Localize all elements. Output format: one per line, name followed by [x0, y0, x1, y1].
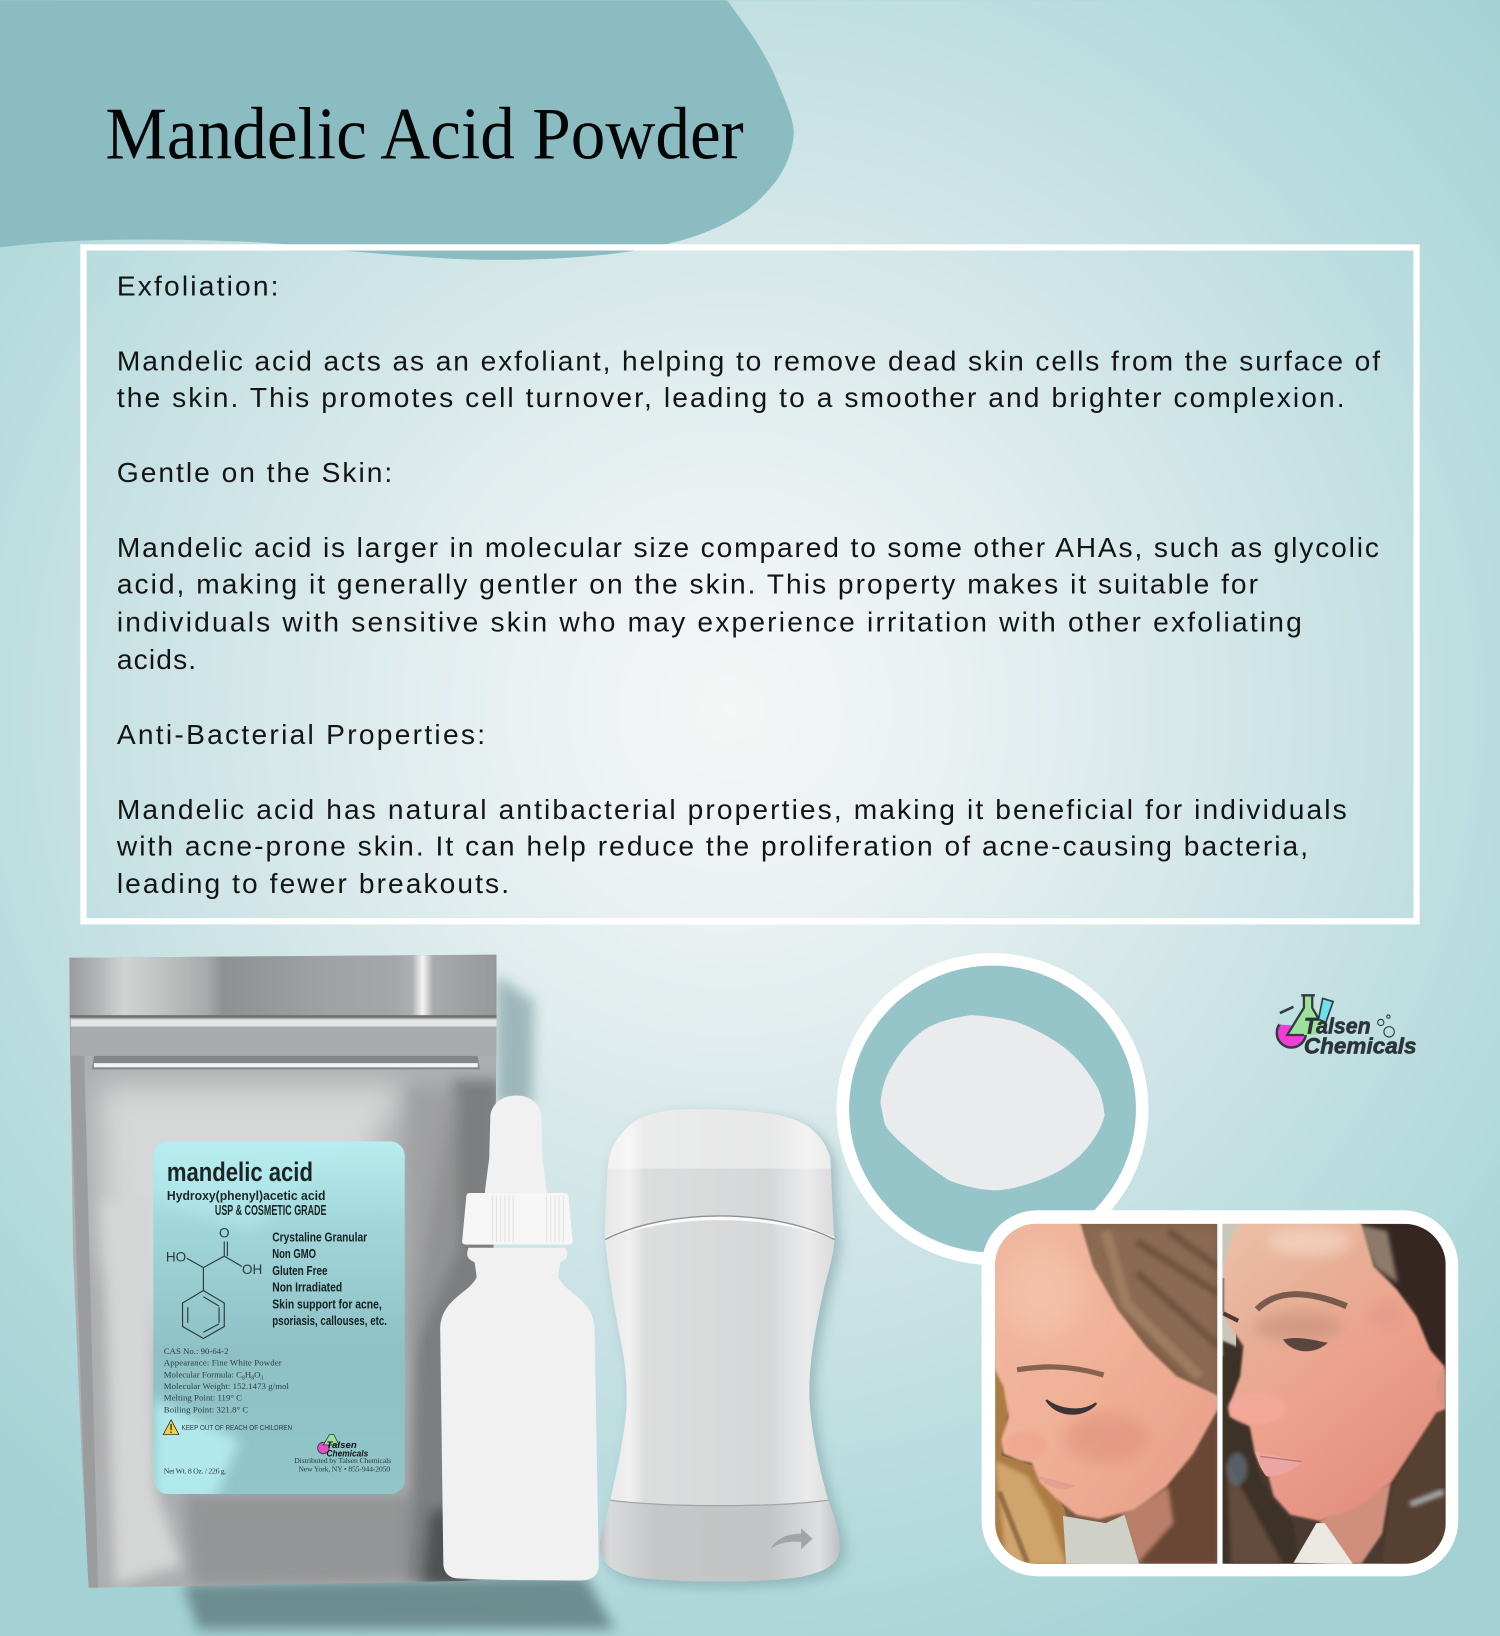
label distributor: Distributed by Talsen Chemicals: [294, 1456, 391, 1465]
freckled cheek: [1064, 1413, 1147, 1463]
panel: benefits text frame: [83, 247, 1417, 921]
product label: [153, 1141, 405, 1502]
icon: warning triangle: [163, 1420, 179, 1434]
eye: [1283, 1338, 1328, 1351]
title: Mandelic Acid Powder: [105, 94, 744, 176]
heading: anti-bacterial properties: Anti-Bacterial Properties:: [117, 719, 485, 750]
label chemical data: H: [245, 1370, 252, 1380]
label chemical data: 8: [251, 1376, 254, 1382]
foil reflections: [69, 1028, 501, 1588]
logo wordmark: Talsen: [1304, 1013, 1371, 1038]
stick container: [595, 1104, 845, 1591]
label chemical data: [164, 1346, 290, 1415]
text block: gentle on the skin: acid, making it generally gentler on the skin. This property makes it suitable for: [117, 569, 1258, 600]
text block: gentle on the skin: Mandelic acid is larger in molecular size compared to some other AHAs, such as glycolic: [117, 532, 1379, 563]
label sheen: [154, 1204, 264, 1494]
label chemical data: Molecular Weight: 152.1473 g/mol: [164, 1381, 290, 1391]
photo: before: [991, 1221, 1218, 1565]
powder pile: [880, 1015, 1105, 1190]
small logo: [318, 1434, 368, 1458]
label chemical data: 8: [242, 1376, 245, 1382]
forehead highlight: [1267, 1227, 1351, 1256]
text block: anti-bacterial properties: with acne-prone skin. It can help reduce the proliferation of acne-causing bacteria,: [116, 831, 1308, 862]
pouch zip line: [92, 1056, 480, 1069]
label features list: Gluten Free: [272, 1263, 328, 1278]
label net weight: Net Wt. 8 Oz. / 226 g.: [164, 1467, 226, 1476]
brand logo: [1277, 995, 1417, 1059]
text block: exfoliation: [117, 346, 1380, 413]
label chemical data: O: [254, 1370, 260, 1380]
bottle cap: [462, 1193, 573, 1245]
molecule diagram: OH: [242, 1262, 262, 1277]
label chemical data: Melting Point: 119° C: [164, 1393, 242, 1403]
molecule diagram: HO: [166, 1249, 186, 1264]
header blob: [0, 0, 794, 260]
hair: [995, 1224, 1218, 1565]
brand logo: Chemicals: [1304, 1034, 1417, 1059]
powder circle: [837, 953, 1148, 1265]
label subheading: Hydroxy(phenyl)acetic acid: [167, 1188, 325, 1203]
label features list: [272, 1230, 387, 1328]
stick lower seam: [610, 1500, 828, 1506]
text block: gentle on the skin: [117, 532, 1379, 675]
icon: flasks: [1277, 995, 1333, 1047]
heading: exfoliation: Exfoliation:: [117, 270, 279, 301]
robe: [1063, 1515, 1139, 1564]
neck: [1121, 1487, 1174, 1564]
blue flask: [1318, 998, 1333, 1022]
label chemical data: Molecular Formula: C: [164, 1370, 242, 1380]
text block: exfoliation: Mandelic acid acts as an exfoliant, helping to remove dead skin cells from the surface of: [117, 346, 1380, 377]
face skin: [991, 1221, 1218, 1519]
label features list: psoriasis, callouses, etc.: [272, 1313, 387, 1328]
text block: anti-bacterial properties: Mandelic acid has natural antibacterial properties, making it beneficial for individuals: [117, 794, 1347, 825]
label distributor: [294, 1456, 391, 1474]
nose tip: [1008, 1433, 1044, 1456]
label warning: KEEP OUT OF REACH OF CHILDREN: [182, 1423, 292, 1432]
icon: arrow: [770, 1528, 813, 1549]
icon: bubbles: [1378, 1015, 1394, 1037]
label features list: Crystaline Granular: [272, 1230, 367, 1245]
label features list: Non Irradiated: [272, 1280, 342, 1295]
label distributor: New York, NY • 855-944-2050: [298, 1465, 390, 1474]
label chemical data: 3: [260, 1376, 263, 1382]
lips: [1038, 1476, 1076, 1489]
text block: anti-bacterial properties: [116, 794, 1347, 899]
molecule diagram: [166, 1225, 262, 1339]
photo: after: [1223, 1221, 1446, 1564]
stick cap highlight: [608, 1109, 831, 1168]
label chemical data: CAS No.: 90-64-2: [164, 1346, 228, 1356]
neck: [1320, 1484, 1390, 1564]
small logo: Chemicals: [326, 1448, 368, 1458]
hair: [1223, 1224, 1446, 1564]
molecule diagram: O: [219, 1225, 230, 1240]
lips: [1255, 1451, 1303, 1476]
before and after photos card: [982, 1210, 1458, 1576]
product shadows: [183, 976, 845, 1630]
label grade: USP & COSMETIC GRADE: [215, 1203, 327, 1219]
text block: exfoliation: the skin. This promotes cell turnover, leading to a smoother and brighter complexion.: [117, 382, 1345, 413]
round flask: [1277, 1018, 1306, 1047]
eyebrow: [1257, 1294, 1347, 1309]
dropper bottle: [440, 1095, 599, 1581]
label features list: Skin support for acne,: [272, 1296, 382, 1311]
label heading: mandelic acid: [167, 1156, 313, 1187]
text block: gentle on the skin: acids.: [117, 644, 196, 675]
label chemical data: Boiling Point: 321.8° C: [164, 1405, 248, 1415]
eye socket shade: [1255, 1312, 1342, 1342]
dropper bulb: [485, 1095, 547, 1196]
ear: [1436, 1369, 1445, 1409]
small logo: Talsen: [326, 1440, 357, 1450]
tall flask: [1287, 995, 1323, 1035]
label chemical data: Appearance: Fine White Powder: [164, 1358, 282, 1368]
label features list: Non GMO: [272, 1246, 316, 1261]
eyelashes: [1046, 1400, 1096, 1414]
window blinds: [1222, 1224, 1242, 1356]
text block: gentle on the skin: individuals with sensitive skin who may experience irritation with other exfoliating: [117, 606, 1302, 637]
stick seam: [605, 1216, 834, 1239]
eyebrow: [1017, 1367, 1104, 1375]
pouch top seal: [69, 953, 498, 1017]
nose tip: [1229, 1393, 1285, 1424]
temple flush: [1408, 1302, 1411, 1307]
robe: [1293, 1523, 1353, 1564]
heading: gentle on the skin: Gentle on the Skin:: [117, 457, 392, 488]
face skin: [1224, 1221, 1445, 1521]
foil pouch: [69, 953, 501, 1588]
bottle body: [440, 1248, 599, 1581]
stick base: [600, 1501, 840, 1582]
text block: anti-bacterial properties: leading to fewer breakouts.: [117, 868, 509, 899]
